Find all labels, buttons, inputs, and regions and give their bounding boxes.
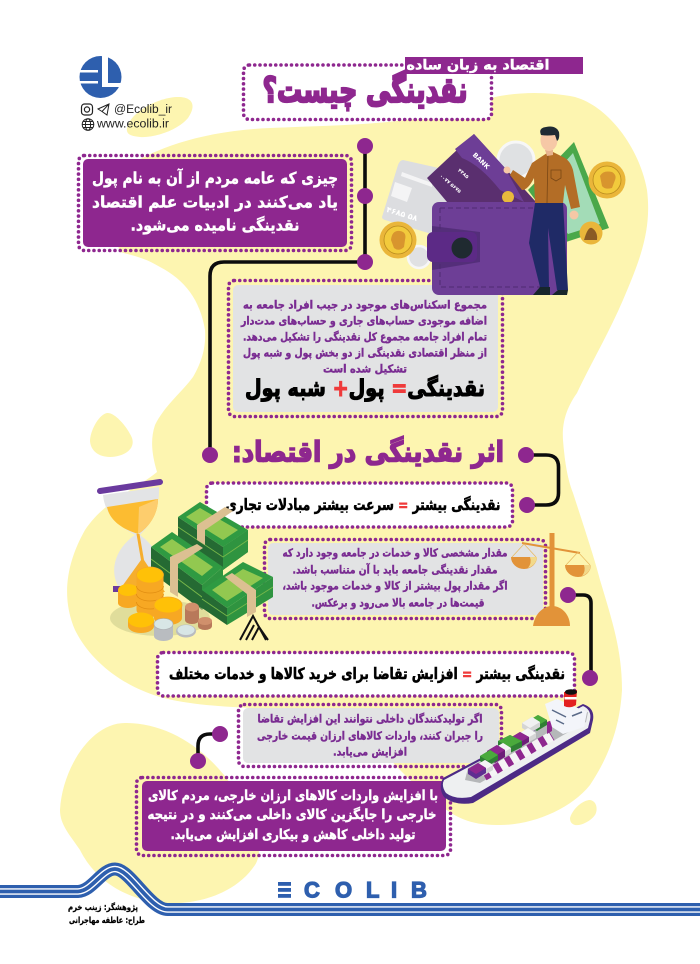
superstructure	[545, 699, 587, 734]
subtitle bar: اقتصاد به زبان ساده	[406, 58, 550, 74]
panel: liquidity explanation: از منظر اقتصادی نقدینگی از دو بخش پول و شبه پول	[243, 346, 487, 360]
panel: liquidity explanation: اضافه موجودی حساب‌های جاری و حساب‌های مدت‌دار	[240, 314, 487, 328]
panel: statement more demand: نقدینگی بیشتر = افزایش تقاضا برای خرید کالاها و خدمات مختلف	[169, 664, 565, 683]
connector: top timeline	[202, 138, 373, 463]
illustration: man with wallet	[380, 127, 626, 295]
illustration: man with wallet: BANK	[471, 151, 492, 172]
equation: نقدینگی= پول+ شبه پول	[245, 375, 485, 402]
man head	[545, 150, 553, 156]
panel: price explanation: مقدار نقدینگی جامعه باید با آن متناسب باشد.	[292, 562, 498, 576]
panel: price explanation: قیمت‌ها در جامعه بالا می‌رود و برعکس.	[312, 596, 484, 610]
icon: instagram	[82, 104, 92, 115]
panel: statement faster trade: نقدینگی بیشتر = سرعت بیشتر مبادلات تجاری	[226, 495, 500, 514]
background blobs	[60, 93, 648, 903]
man shirt	[510, 152, 580, 209]
icon: balance scale	[511, 533, 591, 626]
title box	[244, 65, 492, 120]
deck column strip	[484, 736, 552, 776]
illustration: man with wallet: ۴۴۸۵	[456, 168, 470, 180]
connector: imports to conclusion	[190, 726, 228, 769]
illustration: coins	[110, 567, 212, 641]
handle text: @Ecolib_ir	[114, 104, 172, 116]
panel: liquidity explanation: تشکیل شده است	[323, 362, 407, 376]
funnel	[564, 690, 577, 707]
panel: liquidity explanation	[228, 280, 502, 416]
illustration: hourglass	[100, 482, 165, 592]
gray card	[382, 160, 470, 235]
footer wave	[0, 869, 700, 910]
purple bank card	[427, 134, 536, 202]
social handles	[82, 104, 172, 130]
panel: conclusion: خارجی را جایگزین کالای داخلی می‌کنند و در نتیجه	[148, 806, 436, 823]
white circles	[498, 142, 534, 178]
illustration: container ship	[441, 689, 593, 804]
man legs	[529, 203, 568, 290]
panel: liquidity explanation: تمام افراد جامعه مجموع کل نقدینگی را تشکیل می‌دهد.	[243, 330, 487, 344]
connector: heading to statement	[518, 447, 558, 513]
illustration: man with wallet: ۰۰۷۷ ۵۶۷۵	[438, 173, 462, 195]
panel: price explanation: مقدار مشخصی کالا و خدمات در جامعه وجود دارد که	[282, 546, 508, 560]
containers	[528, 715, 547, 731]
panel: conclusion	[136, 778, 450, 856]
panel: definition: یاد می‌کنند در ادبیات علم اقتصاد	[92, 192, 338, 212]
connector: scale to demand statement	[560, 587, 598, 686]
credits	[68, 902, 145, 926]
panel: conclusion: با افزایش واردات کالاهای ارزان خارجی، مردم کالای	[148, 788, 438, 804]
panel: price explanation	[264, 540, 546, 618]
illustration: cash stacks	[151, 502, 273, 625]
icon: publisher mark	[240, 616, 268, 640]
wallet	[432, 202, 567, 295]
hull	[441, 704, 593, 804]
panel: definition	[78, 156, 352, 250]
coin: left	[380, 222, 416, 258]
illustration: man with wallet: ۴۶۸۵ ۵۸	[385, 205, 419, 223]
stack right	[202, 590, 227, 625]
panel: imports explanation: افزایش می‌یابد.	[333, 746, 407, 758]
logo: ecolib circle	[79, 56, 123, 98]
stack mid	[151, 547, 202, 610]
footer brand: ECOLIB: COLIB	[304, 878, 427, 902]
title text: نقدینگی چیست؟	[262, 70, 468, 111]
panel: conclusion: تولید داخلی کاهش و بیکاری افزایش می‌یابد.	[170, 827, 416, 843]
panel: imports explanation: اگر تولیدکنندگان داخلی نتوانند این افزایش تقاضا	[258, 712, 482, 726]
bank note	[528, 142, 609, 242]
coin: right	[588, 162, 626, 198]
icon: telegram	[98, 104, 109, 115]
icon: globe	[82, 119, 94, 130]
heading: effect of liquidity: اثر نقدینگی در اقتصاد:	[232, 436, 504, 468]
panel: price explanation: اگر مقدار پول بیشتر از کالا و خدمات موجود باشد،	[282, 580, 508, 592]
coin: small	[580, 222, 602, 244]
panel: statement faster trade	[206, 483, 512, 527]
panel: statement more demand	[158, 652, 574, 696]
panel: liquidity explanation: مجموع اسکناس‌های موجود در جیب افراد جامعه به	[243, 298, 487, 312]
panel: imports explanation	[238, 704, 502, 766]
panel: imports explanation: را جبران کنند، واردات کالاهای ارزان قیمت خارجی	[257, 730, 483, 742]
stack back	[178, 517, 248, 570]
panel: definition: چیزی که عامه مردم از آن به نام پول	[92, 168, 338, 188]
website text: www.ecolib.ir	[96, 118, 169, 130]
credits: طراح: عاطفه مهاجرانی	[69, 916, 145, 926]
credits: پژوهشگر: زینب خرم	[68, 902, 138, 913]
panel: definition: نقدینگی نامیده می‌شود.	[130, 216, 300, 234]
